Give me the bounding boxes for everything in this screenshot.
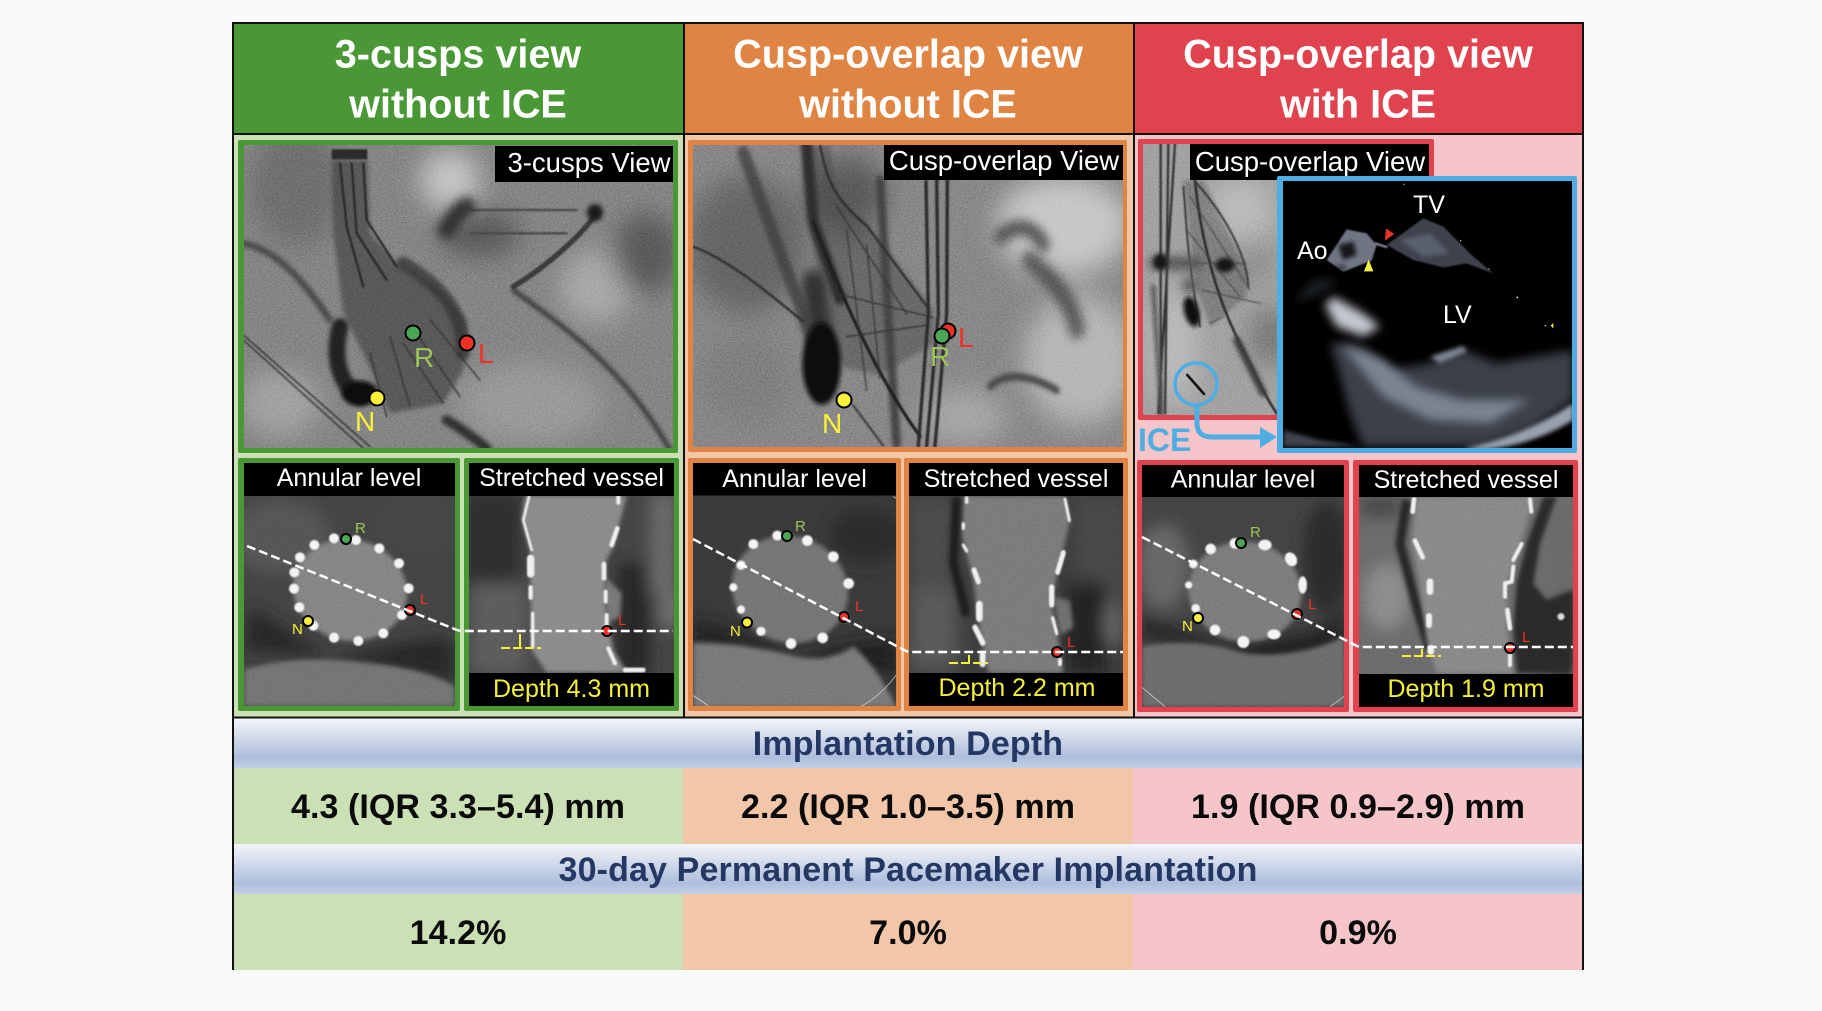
reference line 2 <box>693 539 1123 652</box>
markers R L N <box>822 322 974 439</box>
depth readout <box>469 673 674 706</box>
panel: stretched vessel CT 2 <box>904 458 1128 711</box>
heading: cusp-overlap view with ICE: Cusp-overlap view <box>1183 32 1533 76</box>
band: 30-day permanent pacemaker implantation: 30-day Permanent Pacemaker Implantation <box>559 851 1257 889</box>
markers on annulus: N <box>1182 618 1193 635</box>
markers R L N: R <box>414 342 434 373</box>
label: annular level: Annular level <box>277 464 421 492</box>
view label: Cusp-overlap View <box>1195 146 1425 177</box>
markers on annulus <box>730 518 863 640</box>
ultrasound image <box>1283 181 1573 450</box>
markers on annulus: L <box>1308 596 1316 613</box>
row: implantation depth values: 4.3 (IQR 3.3–5.4) mm <box>291 788 625 826</box>
view label: Cusp-overlap View <box>889 145 1119 176</box>
panel: 3-cusps fluoroscopy view <box>238 127 680 453</box>
markers on annulus: R <box>355 520 366 537</box>
markers on annulus: R <box>1250 524 1261 541</box>
row: pacemaker values: 7.0% <box>869 914 947 952</box>
label: annular level <box>244 463 455 496</box>
markers on annulus: L <box>420 591 428 608</box>
heading: cusp-overlap view without ICE: Cusp-overlap view <box>733 32 1083 76</box>
markers R L N <box>355 326 494 437</box>
markers on annulus: L <box>855 598 863 615</box>
markers on annulus: N <box>292 621 303 638</box>
column backgrounds <box>233 134 1583 718</box>
arrowhead: red <box>1385 228 1394 241</box>
depth marker: L <box>618 612 626 629</box>
markers on annulus <box>292 520 428 638</box>
heading: cusp-overlap view with ICE <box>1134 23 1583 134</box>
depth marker <box>949 634 1075 663</box>
depth marker: L <box>1067 634 1075 651</box>
ICE labels: Ao <box>1297 237 1328 265</box>
panel: annular level CT 2 <box>688 458 903 711</box>
depth marker <box>501 612 626 648</box>
heading: 3-cusps view without ICE <box>233 23 683 134</box>
fluoroscopy image 3 <box>1143 144 1277 415</box>
depth readout: Depth 2.2 mm <box>938 674 1096 702</box>
markers R L N: L <box>958 322 974 353</box>
markers R L N: N <box>355 406 375 437</box>
reference line 3 <box>1142 537 1573 647</box>
panel: cusp-overlap fluoroscopy view without ICE <box>687 140 1137 452</box>
callout: ICE probe circle and arrow: ICE <box>1138 422 1191 458</box>
panel: annular level CT 1 <box>230 458 460 711</box>
label: annular level: Annular level <box>1171 466 1315 494</box>
depth marker <box>1402 629 1530 656</box>
row: implantation depth values <box>233 768 1583 844</box>
heading: 3-cusps view without ICE: without ICE <box>348 82 567 126</box>
label: stretched vessel: Stretched vessel <box>1374 466 1558 494</box>
depth readout: Depth 1.9 mm <box>1387 675 1545 703</box>
markers R L N: L <box>478 338 494 369</box>
label: annular level <box>1142 465 1344 497</box>
markers on annulus: R <box>795 518 806 535</box>
view label: 3-cusps View <box>507 147 671 178</box>
row: implantation depth values: 1.9 (IQR 0.9–2.9) mm <box>1191 788 1525 826</box>
header row <box>233 23 1583 134</box>
label: stretched vessel: Stretched vessel <box>924 465 1108 493</box>
label: annular level: Annular level <box>722 465 867 493</box>
ICE labels <box>1297 191 1472 329</box>
panel: stretched vessel CT 1 <box>463 458 680 711</box>
reference line 1 <box>247 546 673 631</box>
heading: cusp-overlap view without ICE: without ICE <box>798 82 1017 126</box>
band: 30-day permanent pacemaker implantation <box>233 844 1583 894</box>
arrowhead: yellow <box>1364 259 1373 271</box>
panel: ICE image <box>1277 176 1577 453</box>
ICE labels: TV <box>1413 191 1445 219</box>
markers R L N: R <box>930 341 950 372</box>
row: pacemaker values <box>233 894 1583 970</box>
row: implantation depth values: 2.2 (IQR 1.0–3.5) mm <box>741 788 1075 826</box>
fluoroscopy image 2 <box>687 145 1137 447</box>
panel: annular level CT 3 <box>1137 460 1350 712</box>
heading: 3-cusps view without ICE: 3-cusps view <box>335 32 581 76</box>
heading: cusp-overlap view with ICE: with ICE <box>1279 82 1436 126</box>
depth marker: L <box>1522 629 1530 646</box>
depth readout <box>909 673 1123 706</box>
panel: cusp-overlap fluoroscopy view with ICE <box>1138 139 1434 420</box>
label: stretched vessel: Stretched vessel <box>479 464 664 492</box>
panel: stretched vessel CT 3 <box>1353 460 1578 712</box>
depth readout <box>1359 674 1573 707</box>
depth readout: Depth 4.3 mm <box>493 675 650 703</box>
callout: ICE probe circle and arrow <box>1138 363 1277 458</box>
heading: cusp-overlap view without ICE <box>684 23 1133 134</box>
band: implantation depth <box>233 718 1583 768</box>
markers R L N: N <box>822 408 842 439</box>
markers on annulus <box>1182 524 1316 635</box>
ICE labels: LV <box>1443 301 1472 329</box>
row: pacemaker values: 14.2% <box>410 914 506 952</box>
row: pacemaker values: 0.9% <box>1319 914 1397 952</box>
band: implantation depth: Implantation Depth <box>753 725 1063 763</box>
markers on annulus: N <box>730 623 741 640</box>
label: annular level <box>693 463 896 496</box>
fluoroscopy image 1 <box>240 127 680 450</box>
